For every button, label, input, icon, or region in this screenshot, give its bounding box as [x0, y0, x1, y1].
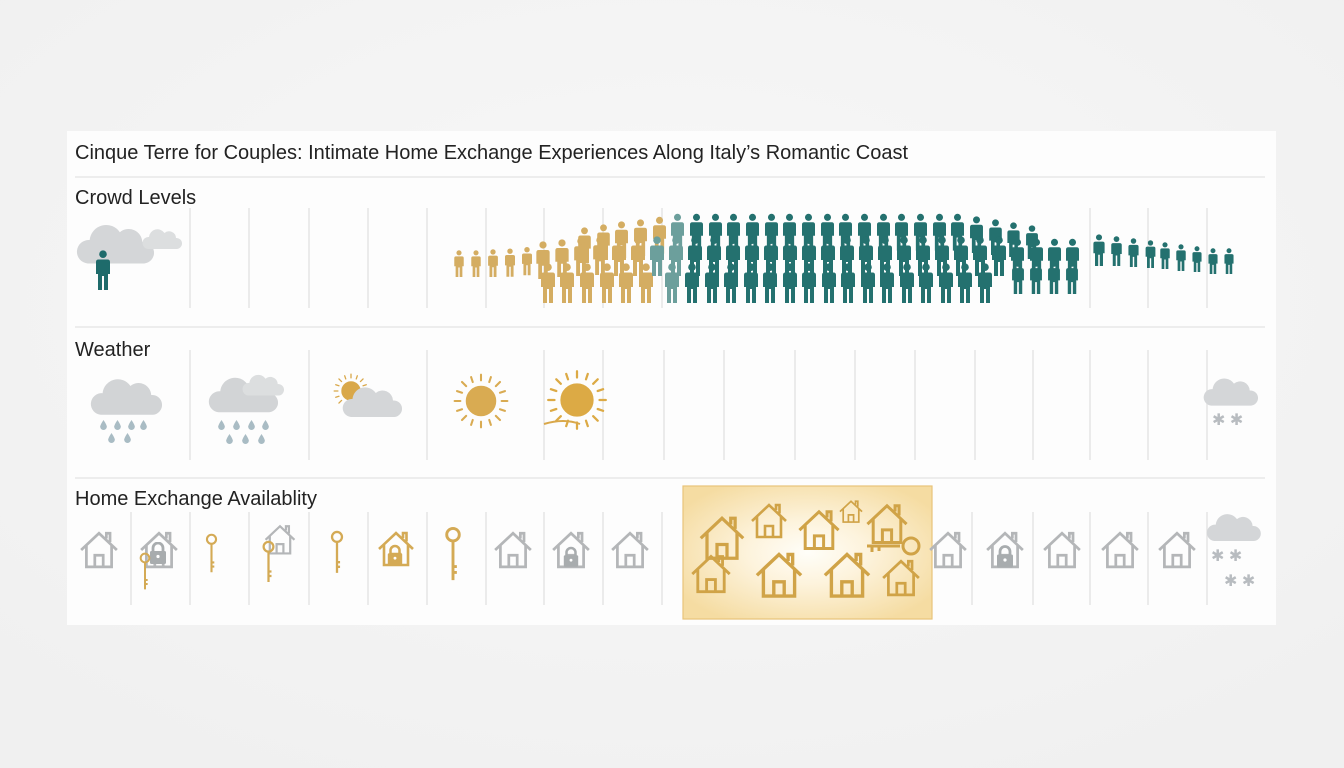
icon: sun — [455, 375, 507, 427]
icon: snow cloud december: ✱ ✱ — [1211, 548, 1242, 565]
icons: home exchange row — [81, 526, 648, 589]
icon: partly sunny — [334, 374, 402, 417]
highlight: peak availability houses — [683, 486, 932, 619]
heading: weather: Weather — [75, 339, 151, 361]
icons: late-year houses — [930, 533, 1195, 568]
icon: snow cloud — [1204, 378, 1258, 429]
icon: snow cloud december: ✱ ✱ — [1224, 573, 1255, 590]
icon: snow cloud: ✱ ✱ — [1212, 412, 1243, 429]
icon: heavy rain cloud — [209, 375, 284, 444]
chart: crowd pictogram — [454, 214, 1234, 303]
heading: crowd levels: Crowd Levels — [75, 187, 196, 209]
icon: rain cloud — [91, 379, 162, 443]
icon: january cloud with single person — [77, 225, 182, 290]
icon: snow cloud december — [1207, 514, 1261, 590]
icon: strong sun — [544, 371, 606, 429]
title: Cinque Terre for Couples: Intimate Home Exchange Experiences Along Italy’s Romantic Coast — [75, 142, 908, 164]
heading: home exchange availability: Home Exchange Availablity — [75, 488, 317, 510]
